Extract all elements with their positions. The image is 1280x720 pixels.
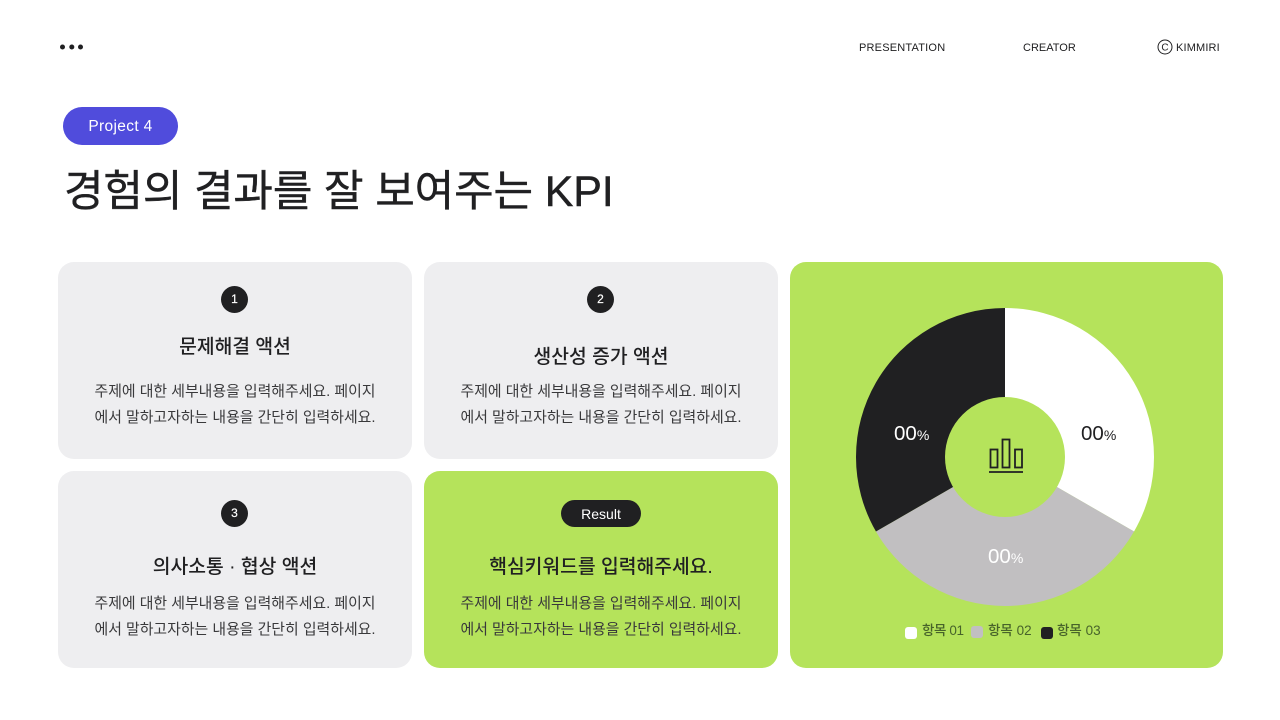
label: dark slice: 00% bbox=[894, 422, 929, 445]
heading: card 1: 문제해결 액션 bbox=[179, 337, 291, 358]
nav: presentation: PRESENTATION bbox=[859, 42, 945, 54]
body text: card 2: 에서 말하고자하는 내용을 간단히 입력하세요. bbox=[460, 410, 741, 426]
number badge 2 bbox=[587, 286, 614, 313]
heading: card 3: 의사소통 · 협상 액션 bbox=[153, 557, 317, 578]
body text: card 1 bbox=[94, 384, 375, 426]
legend item 2: 항목 02 bbox=[988, 623, 1032, 638]
result badge: Result bbox=[581, 506, 621, 522]
heading: result: 핵심키워드를 입력해주세요. bbox=[489, 557, 713, 578]
body text: card 1: 주제에 대한 세부내용을 입력해주세요. 페이지 bbox=[94, 384, 375, 400]
number badge 1 bbox=[221, 286, 248, 313]
label: white slice: 00% bbox=[1081, 422, 1116, 445]
nav: copyright kimmiri: C bbox=[1161, 42, 1169, 54]
number badge 3: 3 bbox=[231, 506, 238, 520]
legend item 3 bbox=[1041, 623, 1101, 639]
body text: card 3: 주제에 대한 세부내용을 입력해주세요. 페이지 bbox=[94, 596, 375, 612]
panel: card 1 bbox=[58, 262, 412, 459]
legend bbox=[905, 623, 1101, 639]
project badge bbox=[63, 107, 178, 145]
number badge 3 bbox=[221, 500, 248, 527]
title: 경험의 결과를 잘 보여주는 KPI bbox=[64, 168, 614, 216]
body text: card 1: 에서 말하고자하는 내용을 간단히 입력하세요. bbox=[94, 410, 375, 426]
label: gray slice: 00% bbox=[988, 545, 1023, 568]
body text: card 3: 에서 말하고자하는 내용을 간단히 입력하세요. bbox=[94, 622, 375, 638]
legend item 1: 항목 01 bbox=[922, 623, 964, 638]
project badge: Project 4 bbox=[88, 118, 153, 135]
body text: result: 주제에 대한 세부내용을 입력해주세요. 페이지 bbox=[460, 596, 741, 612]
body text: result bbox=[460, 596, 741, 638]
body text: card 2: 주제에 대한 세부내용을 입력해주세요. 페이지 bbox=[460, 384, 741, 400]
nav: creator: CREATOR bbox=[1023, 42, 1076, 54]
heading: card 2: 생산성 증가 액션 bbox=[534, 347, 668, 368]
body text: card 3 bbox=[94, 596, 375, 638]
legend item 1 bbox=[905, 623, 964, 639]
body text: result: 에서 말하고자하는 내용을 간단히 입력하세요. bbox=[460, 622, 741, 638]
panel: card 3 bbox=[58, 471, 412, 668]
donut chart bbox=[856, 308, 1154, 606]
body text: card 2 bbox=[460, 384, 741, 426]
nav: copyright kimmiri bbox=[1158, 40, 1220, 54]
icon: bar chart bbox=[989, 440, 1023, 472]
panel: card 2 bbox=[424, 262, 778, 459]
menu dots icon bbox=[60, 44, 83, 50]
panel: chart bbox=[790, 262, 1223, 668]
number badge 1: 1 bbox=[231, 292, 238, 306]
result badge bbox=[561, 500, 641, 527]
panel: result card bbox=[424, 471, 778, 668]
legend item 3: 항목 03 bbox=[1057, 623, 1101, 638]
nav: copyright kimmiri: KIMMIRI bbox=[1176, 42, 1220, 54]
number badge 2: 2 bbox=[597, 292, 604, 306]
